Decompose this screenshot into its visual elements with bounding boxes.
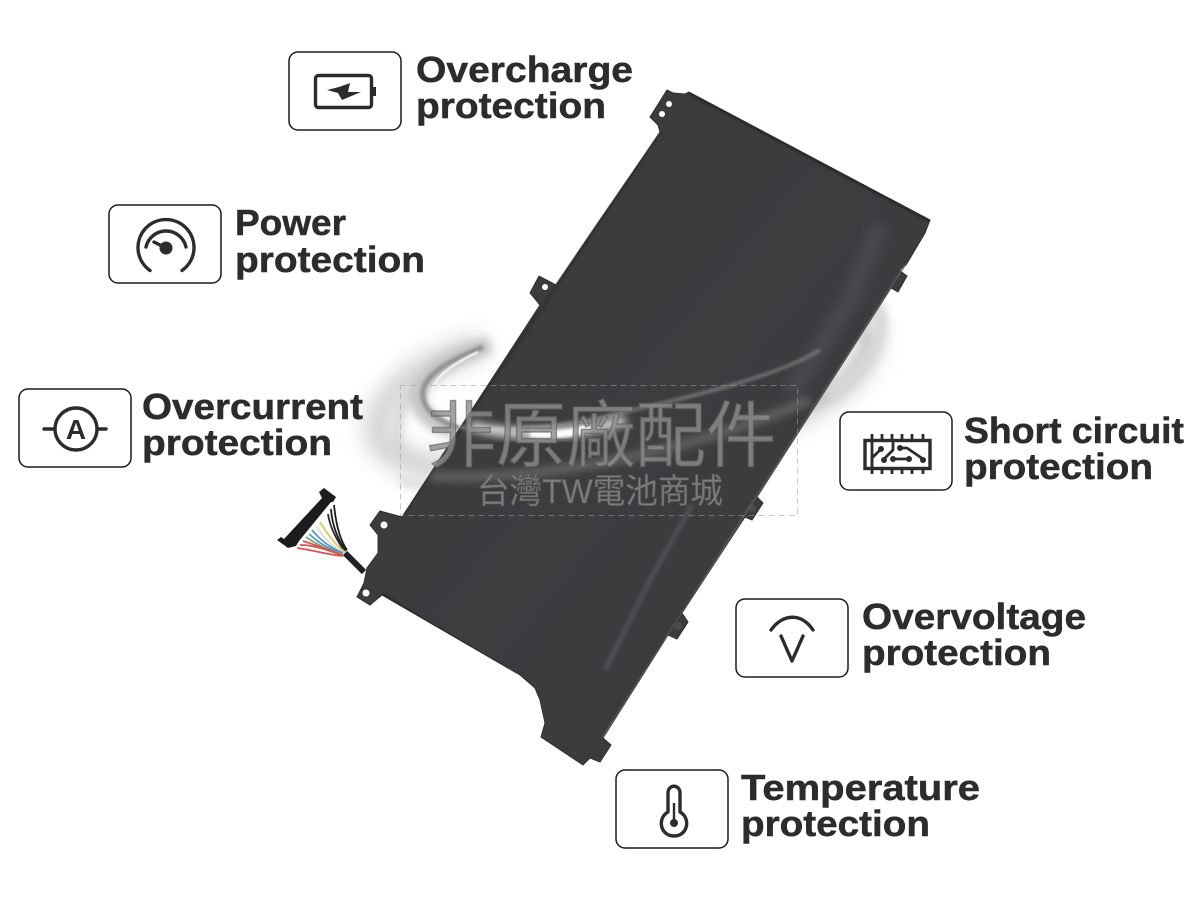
feature: power protection — [109, 202, 425, 283]
icon: ammeter: A — [66, 414, 86, 445]
cable into battery — [345, 553, 364, 572]
icon box — [109, 205, 221, 283]
label: Temperature — [741, 767, 980, 808]
watermark — [400, 386, 798, 516]
label: protection — [964, 446, 1153, 487]
icon: voltage — [771, 617, 813, 661]
feature: overcharge protection — [289, 49, 633, 130]
icon box — [19, 389, 131, 467]
battery pack — [357, 90, 930, 765]
right side tab details — [674, 504, 756, 630]
label: protection — [142, 422, 332, 463]
icon box — [616, 770, 728, 848]
icon: ammeter — [44, 408, 106, 450]
label: Short circuit — [964, 410, 1184, 451]
watermark sub text: 台灣TW電池商城 — [477, 473, 723, 511]
icon: battery with bolt — [316, 76, 374, 108]
label: Power — [235, 202, 346, 243]
surface folds and highlights — [382, 92, 930, 738]
swirl glow behind battery — [377, 290, 880, 487]
watermark dashed frame — [400, 386, 798, 516]
label: Overcharge — [416, 49, 633, 90]
label: Overvoltage — [862, 596, 1086, 637]
battery connector and wires — [277, 488, 364, 572]
icon box — [736, 599, 848, 677]
icon box — [840, 412, 952, 490]
feature: short circuit protection — [840, 410, 1184, 490]
label: protection — [416, 85, 606, 126]
feature: overcurrent protection — [19, 386, 363, 467]
label: protection — [741, 803, 930, 844]
feature: temperature protection — [616, 767, 980, 848]
feature: overvoltage protection — [736, 596, 1086, 677]
swirl highlights across battery — [430, 350, 820, 477]
watermark main text: 非原廠配件 — [426, 397, 776, 477]
icon: gauge — [138, 220, 194, 270]
icon: thermometer — [661, 786, 687, 836]
icon: circuit chip — [865, 434, 930, 474]
battery body silhouette — [357, 90, 930, 765]
label: protection — [862, 632, 1051, 673]
label: protection — [235, 239, 425, 280]
coloured wires — [297, 505, 347, 556]
connector comb — [277, 488, 336, 548]
icon box — [289, 52, 401, 130]
mounting tab holes — [362, 101, 672, 596]
label: Overcurrent — [142, 386, 363, 427]
